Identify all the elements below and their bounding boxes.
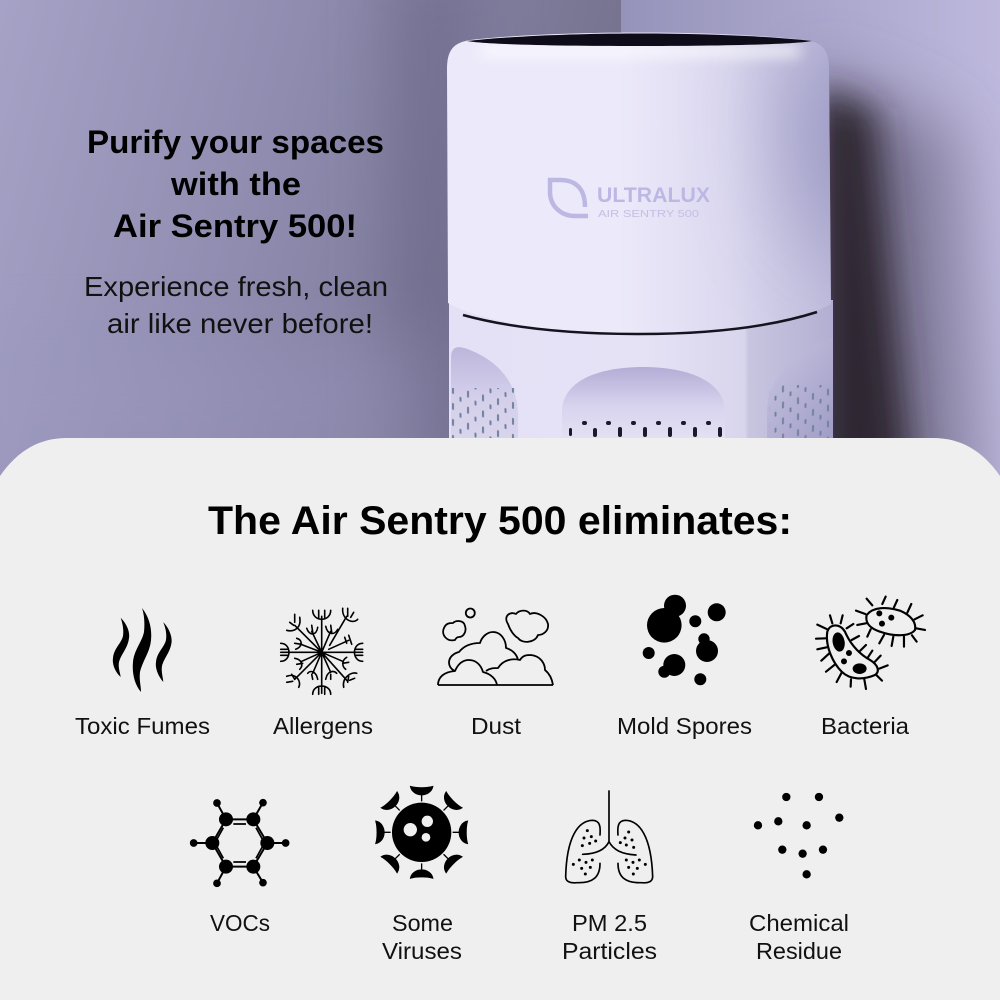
icon: dandelion bbox=[281, 608, 363, 694]
label: PM 2.5 bbox=[572, 910, 647, 936]
background: room walls bbox=[0, 0, 1000, 476]
logo: leaf bbox=[550, 180, 588, 216]
label bbox=[562, 910, 657, 964]
icon: bacteria bbox=[816, 597, 925, 689]
label: Allergens bbox=[273, 713, 373, 739]
seam bbox=[463, 312, 817, 334]
item: some viruses bbox=[376, 787, 467, 964]
purifier lower body bbox=[449, 300, 833, 440]
headline text block: with the bbox=[170, 166, 301, 202]
bottom panel bbox=[0, 438, 1000, 1000]
icon: clouds bbox=[438, 608, 553, 685]
item: PM 2.5 particles bbox=[562, 791, 657, 964]
label: Mold Spores bbox=[617, 713, 752, 739]
left intake window bbox=[451, 347, 518, 440]
headline text block: Air Sentry 500! bbox=[113, 208, 357, 244]
left vent holes bbox=[451, 388, 518, 438]
sub-headline text block bbox=[84, 271, 388, 339]
centre intake window bbox=[562, 367, 725, 440]
icon: lungs bbox=[566, 791, 653, 883]
item: dust bbox=[438, 608, 553, 739]
icon: spores bbox=[643, 595, 726, 685]
right vent holes bbox=[769, 385, 832, 438]
top opening bbox=[467, 34, 812, 46]
panel heading: The Air Sentry 500 eliminates: bbox=[208, 499, 792, 543]
icon: virus bbox=[376, 787, 467, 878]
label: Particles bbox=[562, 938, 657, 964]
item: chemical residue bbox=[749, 793, 849, 964]
label: Viruses bbox=[382, 938, 462, 964]
icon: molecule bbox=[190, 799, 289, 887]
headline text block: Purify your spaces bbox=[87, 124, 384, 160]
label: VOCs bbox=[210, 910, 270, 936]
logo subtitle: AIR SENTRY 500 bbox=[598, 209, 700, 220]
air purifier product bbox=[447, 32, 833, 438]
label: Bacteria bbox=[821, 713, 909, 739]
label: Toxic Fumes bbox=[75, 713, 210, 739]
sub-headline text block: Experience fresh, clean bbox=[84, 271, 388, 302]
headline text block bbox=[87, 124, 384, 244]
item: VOCs bbox=[190, 799, 289, 936]
item: bacteria bbox=[816, 597, 925, 739]
label bbox=[749, 910, 849, 964]
label bbox=[382, 910, 462, 964]
logo wordmark: ULTRALUX bbox=[597, 184, 710, 207]
label: Dust bbox=[471, 713, 522, 739]
sub-headline text block: air like never before! bbox=[107, 308, 373, 339]
centre vent holes bbox=[569, 421, 722, 437]
icon: dots bbox=[754, 793, 843, 878]
purifier upper body bbox=[447, 32, 831, 326]
item: allergens bbox=[273, 608, 373, 739]
label: Some bbox=[392, 910, 453, 936]
right intake window bbox=[767, 338, 833, 440]
label: Chemical bbox=[749, 910, 849, 936]
item: toxic fumes bbox=[75, 608, 210, 739]
item: mold spores bbox=[617, 595, 752, 739]
icon: fumes bbox=[113, 608, 172, 692]
label: Residue bbox=[756, 938, 842, 964]
